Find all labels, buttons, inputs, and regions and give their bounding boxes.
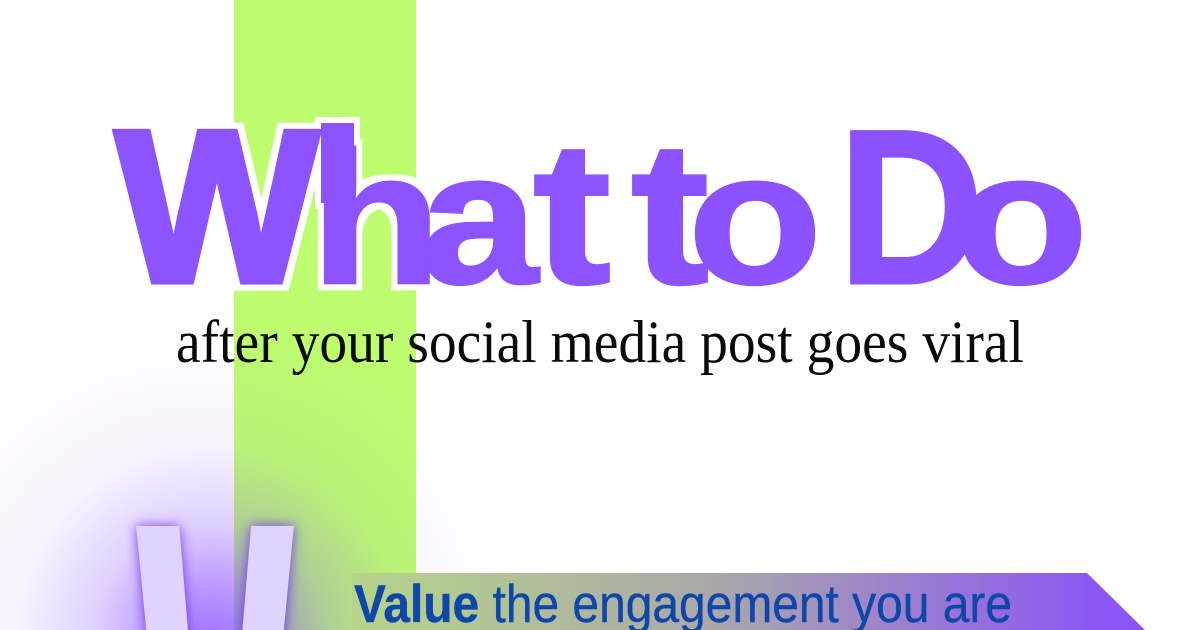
subtitle: after your social media post goes viral [176,309,1024,375]
title word: to [631,99,822,326]
title word: Do: o [954,114,1088,323]
title word: to: o [688,114,822,323]
gradient banner [352,573,1145,630]
purple glow behind letter [0,430,430,630]
title word: What: h [310,113,442,323]
title word: What: t [533,99,611,326]
green vertical band [234,0,416,630]
title word: Do [838,84,1088,330]
title word: Do: D [838,84,984,330]
title word: to: t [631,99,709,326]
title word: What [116,85,611,327]
title word: What: W [116,85,318,327]
title word: What: a [420,114,540,323]
purple wash behind letter [0,320,520,630]
title: What to Do [116,84,1088,330]
